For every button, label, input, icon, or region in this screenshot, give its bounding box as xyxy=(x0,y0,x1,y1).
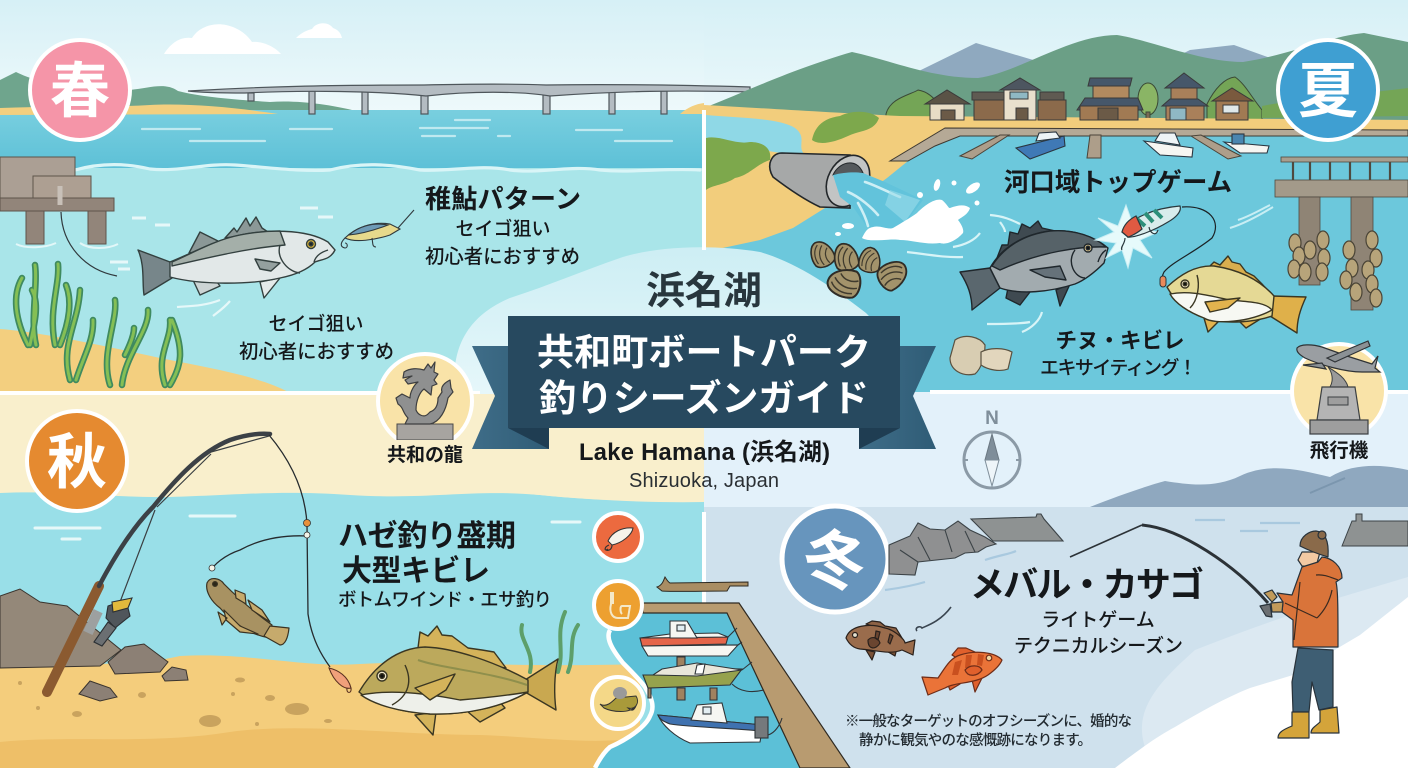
icon: bait chip xyxy=(592,677,644,729)
boats: summer harbor xyxy=(1016,132,1269,159)
fishing rod and reel xyxy=(47,434,330,692)
pier and oyster pilings: summer xyxy=(1230,157,1408,310)
blue boat xyxy=(658,703,782,743)
seagrass: spring xyxy=(16,264,180,385)
text: spring top xyxy=(425,184,581,268)
bush: left of sand xyxy=(812,112,879,143)
oyster rocks: summer bottom xyxy=(950,336,1012,375)
icon: lure chip xyxy=(594,513,642,561)
background: summer panel xyxy=(704,0,1408,394)
starburst and lure: summer xyxy=(1095,205,1215,287)
text: spring top: セイゴ狙い xyxy=(455,217,551,240)
text: winter heading: ライトゲーム xyxy=(1041,609,1155,631)
small white boat xyxy=(1224,134,1269,153)
hills and mountains: summer xyxy=(704,33,1408,125)
text: spring top: 稚鮎パターン xyxy=(425,184,581,214)
harbor shoreline xyxy=(595,630,652,768)
landmark: dragon statue xyxy=(378,354,472,466)
background: spring panel xyxy=(0,0,704,394)
lure: autumn xyxy=(329,668,351,692)
fish: mebaru xyxy=(846,621,915,660)
subtitle: Lake Hamana: Shizuoka, Japan xyxy=(629,470,779,492)
compass xyxy=(963,408,1021,488)
lure: spring xyxy=(341,210,414,248)
posts xyxy=(648,657,717,700)
hills and sand spit: spring xyxy=(0,72,704,115)
ribbon tail right xyxy=(859,346,936,449)
seagrass: autumn xyxy=(521,612,578,672)
text: summer heading: 河口域トップゲーム xyxy=(1004,169,1232,197)
season badge: winter: 冬 xyxy=(796,520,873,602)
dock xyxy=(643,577,850,768)
subtitle: Lake Hamana xyxy=(579,439,830,492)
right jetty: winter xyxy=(1342,514,1408,546)
center lower background xyxy=(470,394,704,502)
rope xyxy=(768,718,782,735)
autumn water highlights xyxy=(35,516,580,539)
season badge: summer: 夏 xyxy=(1298,58,1358,125)
fish: seabass xyxy=(110,208,335,316)
rope xyxy=(732,662,764,692)
drain pipe xyxy=(770,148,878,214)
title text xyxy=(537,332,871,419)
season badge: spring xyxy=(30,40,130,140)
season badge: autumn: 秋 xyxy=(47,429,107,496)
pier: spring xyxy=(0,157,118,276)
bridge xyxy=(188,84,750,114)
text: winter note xyxy=(845,712,1132,749)
text: spring bottom: 初心者におすすめ xyxy=(239,341,394,363)
text: spring bottom xyxy=(239,312,394,363)
text: spring top: 初心者におすすめ xyxy=(425,246,580,268)
compass: N xyxy=(985,408,999,429)
text: winter note: 静かに観気やのな感慨跡になります。 xyxy=(859,731,1092,749)
background: autumn panel xyxy=(0,392,704,768)
background: winter panel xyxy=(704,392,1408,768)
quay and mooring piers: summer xyxy=(890,128,1408,161)
blue boat xyxy=(1016,132,1065,159)
house 5 xyxy=(1212,88,1253,120)
angler with rod xyxy=(1070,525,1342,738)
breakwater: winter xyxy=(889,514,1063,575)
gloves and reel xyxy=(1260,590,1283,617)
hat xyxy=(1300,531,1328,557)
icon: hook rig chip xyxy=(594,581,642,629)
water swirls: winter xyxy=(885,520,1300,590)
jacket fold lines xyxy=(1285,575,1338,640)
title text: 共和町ボートパーク xyxy=(537,332,871,373)
text: summer sub xyxy=(1040,329,1197,379)
season badge: summer xyxy=(1278,40,1378,140)
water ripples: spring xyxy=(75,120,700,171)
season badge: autumn xyxy=(27,411,127,511)
ribbon main xyxy=(508,316,900,428)
house 4 xyxy=(1162,73,1208,120)
fish: goby xyxy=(207,579,289,645)
harbor water xyxy=(595,613,800,768)
text: winter heading xyxy=(970,565,1204,657)
fish: kibire autumn xyxy=(359,626,558,735)
text: autumn: ハゼ釣り盛期 xyxy=(338,520,516,553)
sand pebbles: autumn xyxy=(18,678,332,727)
rocks: autumn xyxy=(0,589,188,701)
snow bank xyxy=(1115,577,1408,768)
text: summer sub: チヌ・キビレ xyxy=(1055,329,1185,353)
season badge: winter xyxy=(782,506,888,612)
fishing line and rod tip xyxy=(1070,525,1142,557)
reel xyxy=(94,598,132,646)
inlet water: summer xyxy=(706,115,805,155)
fish: chinu black sea bream xyxy=(960,221,1108,332)
text: winter note: ※一般なターゲットのオフシーズンに、婚的な xyxy=(845,712,1132,730)
boats: autumn harbor xyxy=(640,621,782,743)
cloud: right xyxy=(296,23,342,38)
season badge: spring: 春 xyxy=(50,58,110,125)
village houses xyxy=(925,73,1253,120)
house 2 xyxy=(972,78,1066,120)
boot right xyxy=(1311,707,1339,733)
landmark: airplane monument: 飛行機 xyxy=(1310,440,1369,462)
trousers xyxy=(1292,648,1333,712)
bushes and trees: summer xyxy=(886,77,1408,121)
water stream from pipe xyxy=(833,172,923,232)
text: autumn: ボトムワインド・エサ釣り xyxy=(338,589,552,610)
dividers xyxy=(0,110,1408,604)
splash xyxy=(835,178,982,244)
face xyxy=(1298,552,1320,567)
spray lines xyxy=(907,215,1020,257)
white boat xyxy=(1144,133,1193,157)
boots xyxy=(1278,712,1309,738)
jacket xyxy=(1277,557,1342,647)
fish: kasago xyxy=(922,648,1002,695)
center blob xyxy=(454,247,905,394)
text: winter heading: テクニカルシーズン xyxy=(1014,634,1183,657)
sand: summer shore xyxy=(704,105,1408,252)
red boat xyxy=(640,621,742,656)
text: winter heading: メバル・カサゴ xyxy=(970,565,1204,605)
oysters: summer xyxy=(807,238,912,300)
house 3 xyxy=(1077,78,1143,120)
ribbon tail left xyxy=(472,346,549,449)
sand: spring xyxy=(0,329,292,394)
house 1 xyxy=(925,90,970,120)
olive boat xyxy=(643,662,764,692)
landmark: airplane monument xyxy=(1292,341,1386,462)
center lower right background xyxy=(704,394,930,507)
text: spring bottom: セイゴ狙い xyxy=(268,312,364,335)
title text: 釣りシーズンガイド xyxy=(539,378,869,419)
title: 浜名湖: 浜名湖 xyxy=(646,270,762,313)
landmark: dragon statue: 共和の龍 xyxy=(387,444,463,466)
rod upper xyxy=(1142,525,1268,603)
title ribbon xyxy=(472,316,936,449)
rope xyxy=(728,628,742,645)
text: summer sub: エキサイティング！ xyxy=(1040,357,1197,379)
subtitle: Lake Hamana: Lake Hamana (浜名湖) xyxy=(579,439,830,466)
text: autumn: 大型キビレ xyxy=(342,555,490,588)
text: autumn xyxy=(338,520,552,610)
fish: yellowfin kibire summer xyxy=(1167,256,1306,333)
hook rig: winter xyxy=(916,607,951,631)
cloud: left xyxy=(164,24,281,54)
bush: far left xyxy=(706,137,770,190)
